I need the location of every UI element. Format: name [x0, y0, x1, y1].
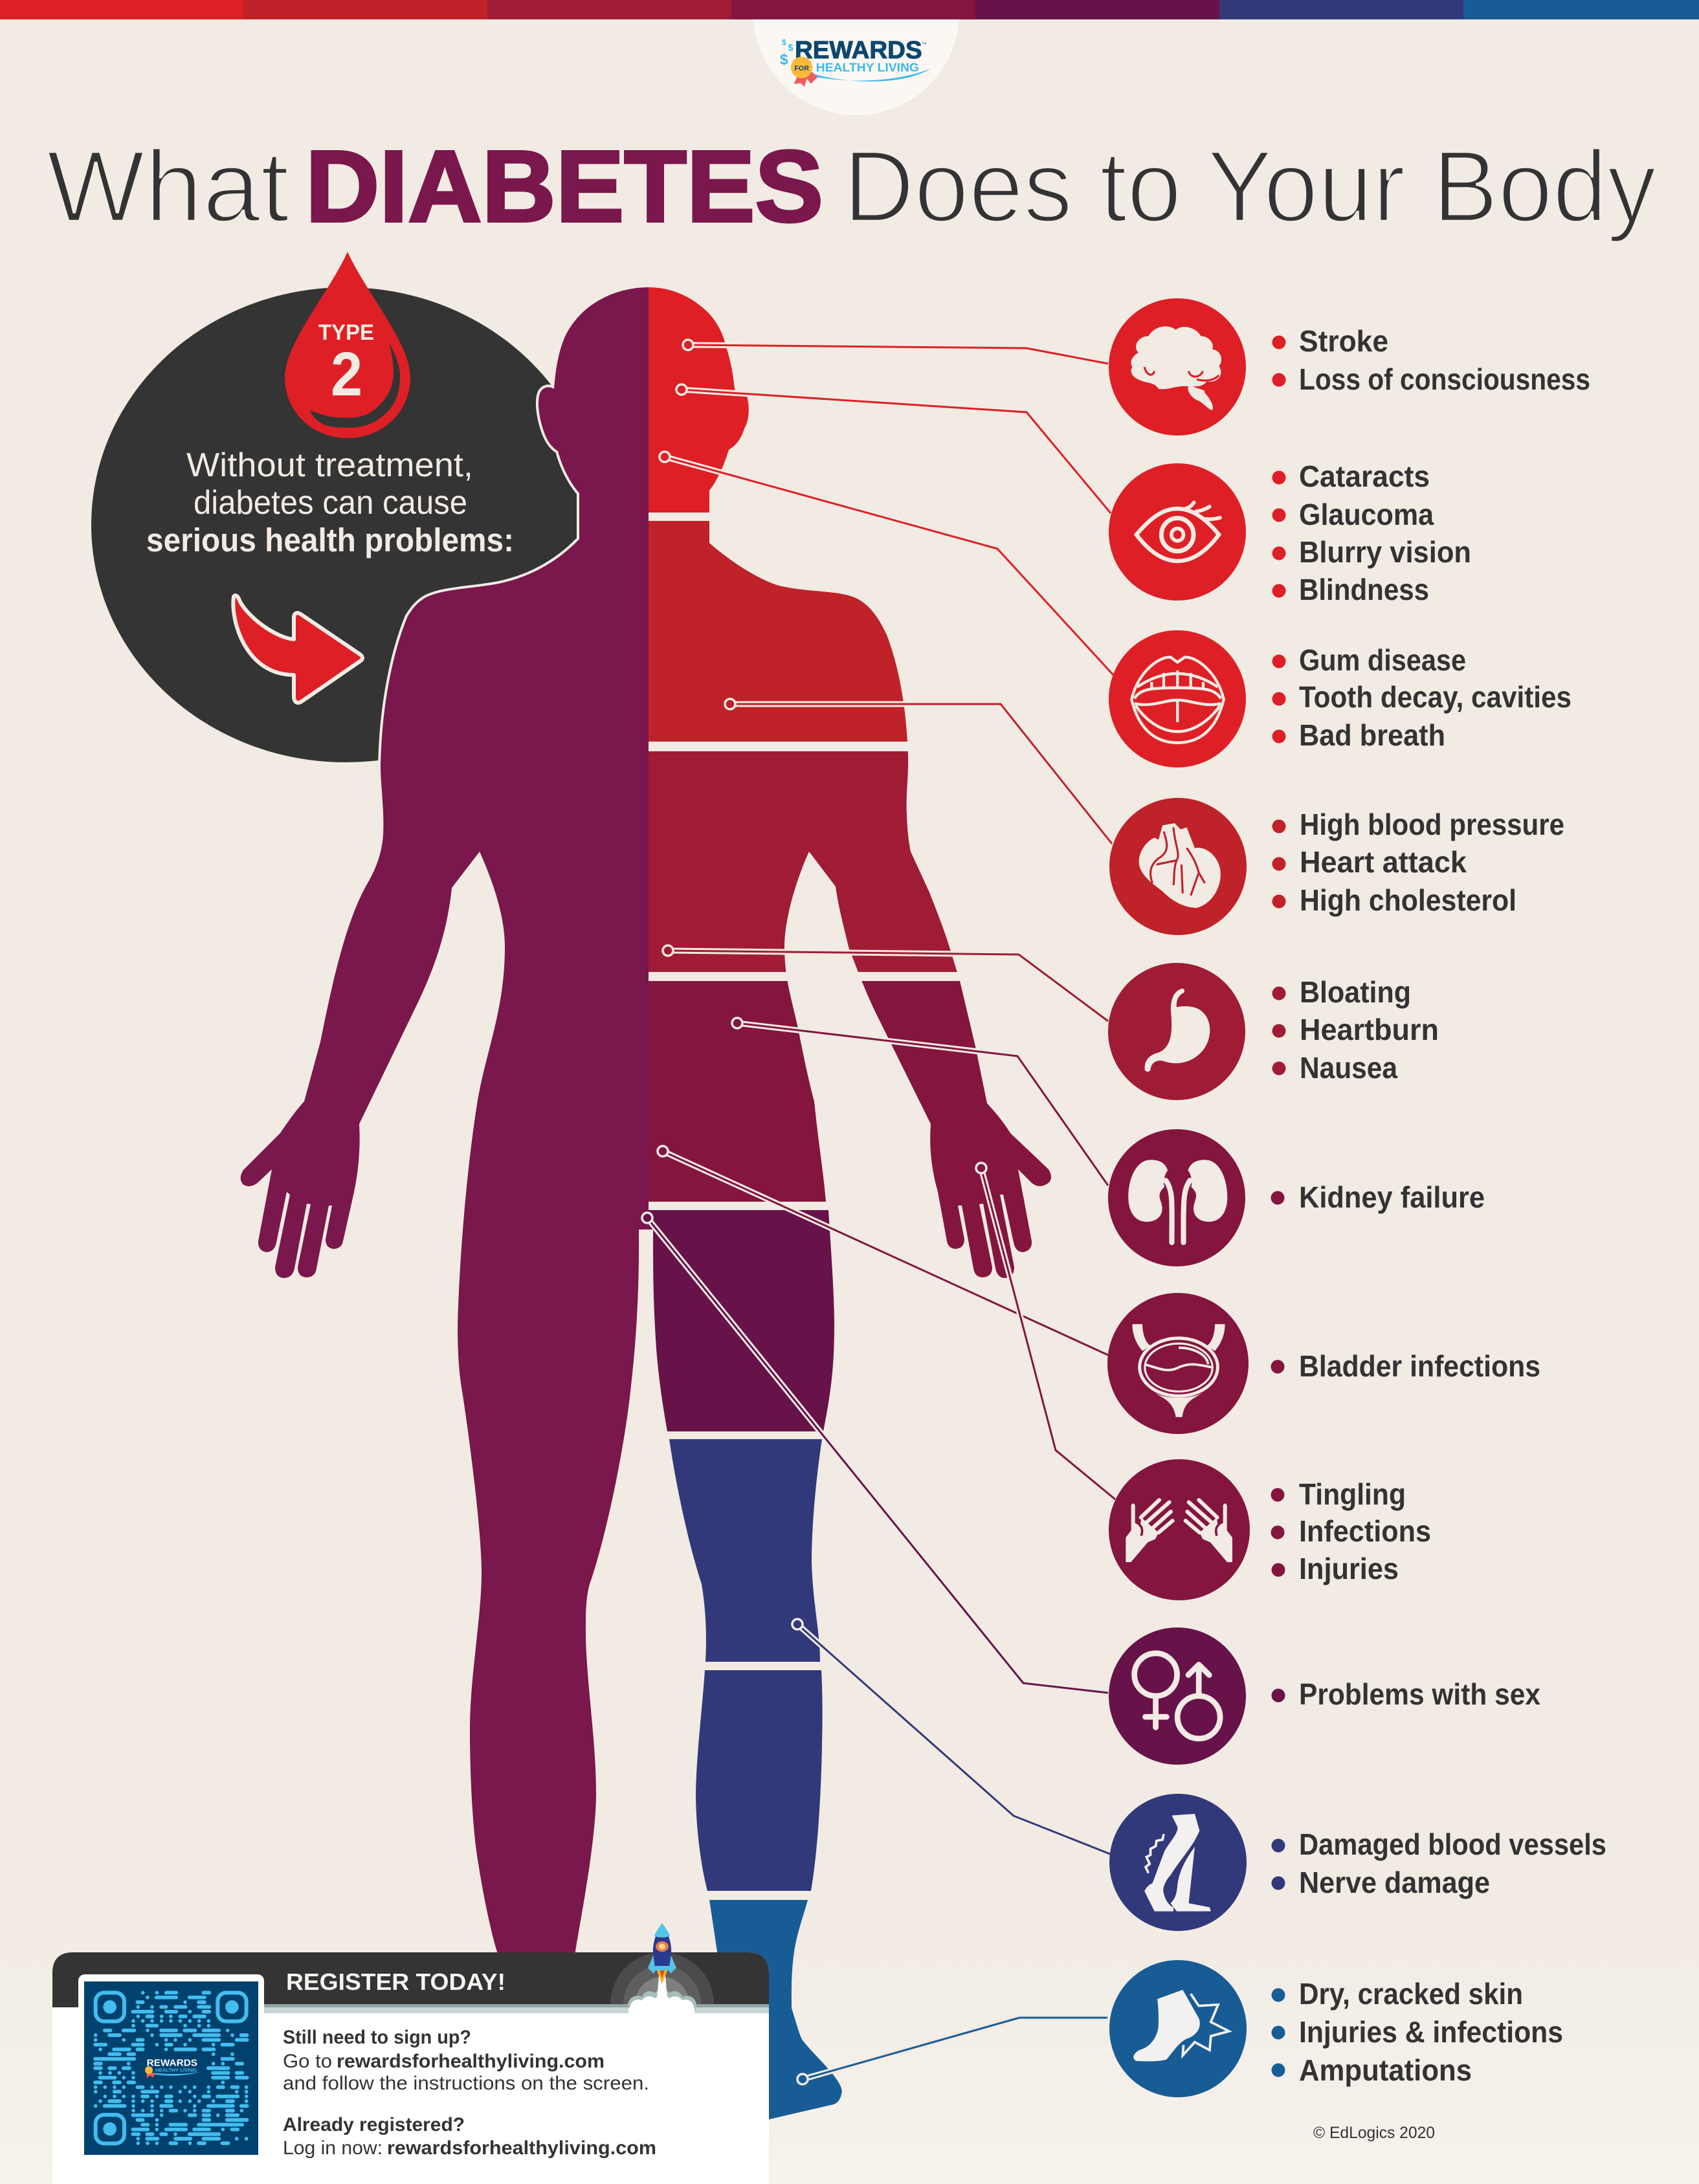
list: heart: High blood pressure	[1300, 808, 1564, 841]
list: feet: Amputations	[1299, 2053, 1472, 2087]
type 2 blood drop: TYPE	[318, 320, 374, 345]
logo: Rewards for Healthy Living: TM	[922, 41, 926, 45]
list: mouth	[1272, 643, 1571, 752]
list: brain	[1272, 324, 1590, 396]
icon: injured foot	[1133, 1990, 1229, 2061]
logo: Rewards for Healthy Living	[753, 0, 959, 115]
QR code	[78, 1974, 264, 2155]
list: stomach: Bloating	[1300, 975, 1411, 1009]
register text: sign up: Go to	[283, 2051, 332, 2072]
connector: eye	[676, 384, 1111, 513]
connector lines	[642, 340, 1115, 2084]
logo: Rewards for Healthy Living: $	[788, 43, 793, 53]
title: What	[47, 130, 289, 243]
connector: kidney	[732, 1018, 1108, 1186]
body: right silhouette colour bands	[649, 287, 1051, 2120]
list: heart	[1272, 808, 1564, 917]
list: legs	[1271, 1827, 1606, 1899]
register heading: REGISTER TODAY!	[286, 1969, 505, 1995]
list: stomach: Nausea	[1300, 1051, 1397, 1085]
register text: already registered: rewardsforhealthyliving.com	[387, 2137, 656, 2159]
panel: legs	[1109, 1794, 1606, 1931]
copyright: © EdLogics 2020	[1313, 2124, 1435, 2142]
list: eye: Glaucoma	[1299, 498, 1434, 531]
icon: hands	[1126, 1500, 1232, 1562]
list: heart: High cholesterol	[1300, 883, 1516, 917]
title: Does to Your Body	[843, 130, 1656, 243]
panel: brain	[1109, 298, 1590, 436]
panel: feet	[1109, 1960, 1563, 2097]
list: hands: Infections	[1299, 1514, 1431, 1548]
panel: heart	[1109, 798, 1564, 935]
QR code: HEALTHY LIVING	[155, 2068, 197, 2073]
list: kidney: Kidney failure	[1299, 1180, 1485, 1214]
list: stomach: Heartburn	[1300, 1013, 1439, 1046]
list: feet: Injuries & infections	[1299, 2015, 1563, 2049]
connector: stomach	[663, 945, 1108, 1021]
list: legs: Nerve damage	[1299, 1866, 1490, 1899]
title: DIABETES	[305, 130, 823, 243]
list: eye	[1272, 459, 1471, 606]
list: feet: Dry, cracked skin	[1299, 1977, 1523, 2011]
register text: sign up: rewardsforhealthyliving.com	[337, 2051, 605, 2072]
callout text: Without treatment,	[186, 447, 473, 484]
icon: female and male symbols	[1135, 1653, 1220, 1739]
panel: eye	[1109, 459, 1471, 606]
list: sexual health: Problems with sex	[1299, 1677, 1540, 1711]
body: left silhouette	[241, 287, 649, 1967]
icon: eye	[1137, 502, 1220, 561]
list: mouth: Bad breath	[1299, 718, 1445, 752]
logo: Rewards for Healthy Living: REWARDS	[795, 37, 922, 64]
title	[47, 130, 1656, 243]
list: mouth: Gum disease	[1299, 643, 1466, 677]
list: eye: Blurry vision	[1299, 535, 1471, 569]
arrow	[233, 595, 362, 703]
callout text: serious health problems:	[146, 522, 514, 558]
connector: feet	[797, 2018, 1107, 2084]
list: stomach	[1272, 975, 1439, 1085]
list: legs: Damaged blood vessels	[1299, 1827, 1606, 1861]
connector: brain	[683, 340, 1108, 364]
icon: kidneys	[1128, 1160, 1227, 1242]
panel: bladder	[1107, 1293, 1540, 1434]
icon: bladder	[1133, 1324, 1225, 1417]
connector: sexual organs	[642, 1213, 1108, 1693]
register text: sign up: and follow the instructions on the screen.	[283, 2073, 649, 2094]
connector: bladder	[658, 1146, 1108, 1355]
connector: legs	[792, 1619, 1110, 1854]
register text: sign up: Still need to sign up?	[283, 2027, 471, 2048]
connector: hands	[976, 1163, 1115, 1499]
panel: stomach	[1108, 963, 1439, 1100]
logo: Rewards for Healthy Living: HEALTHY LIVING	[816, 61, 919, 74]
register text: already registered	[283, 2114, 656, 2159]
callout text	[146, 447, 514, 558]
type 2 blood drop: 2	[331, 340, 362, 409]
panel: mouth	[1109, 630, 1571, 767]
list: feet	[1271, 1977, 1563, 2087]
connector: heart	[725, 699, 1112, 844]
icon: stomach	[1145, 989, 1210, 1072]
icon: mouth	[1131, 657, 1224, 743]
list: brain: Loss of consciousness	[1299, 362, 1590, 396]
list: mouth: Tooth decay, cavities	[1299, 680, 1571, 714]
register text: sign up	[283, 2027, 649, 2094]
list: eye: Cataracts	[1299, 459, 1430, 493]
list: hands: Injuries	[1299, 1552, 1399, 1585]
connector: mouth	[660, 452, 1113, 675]
list: bladder: Bladder infections	[1299, 1349, 1540, 1383]
icon: brain	[1131, 326, 1221, 410]
top colour bar	[0, 0, 1699, 19]
logo: Rewards for Healthy Living: FOR	[794, 65, 809, 72]
icon: legs	[1144, 1814, 1211, 1912]
list: eye: Blindness	[1299, 573, 1429, 606]
list: hands	[1271, 1477, 1431, 1585]
register text: already registered: Already registered?	[283, 2114, 465, 2135]
logo: Rewards for Healthy Living: $	[782, 38, 786, 47]
panel: kidney	[1108, 1129, 1485, 1266]
rocket launch illustration	[610, 1923, 714, 2016]
list: hands: Tingling	[1299, 1477, 1406, 1511]
type 2 blood drop	[285, 252, 410, 438]
dark callout circle	[91, 287, 600, 762]
register text: already registered: Log in now:	[283, 2137, 383, 2159]
list: brain: Stroke	[1299, 324, 1388, 358]
list: heart: Heart attack	[1300, 845, 1467, 879]
panel: sexual health	[1109, 1627, 1540, 1765]
logo: Rewards for Healthy Living: $	[780, 51, 788, 68]
panel: hands	[1109, 1459, 1431, 1600]
callout text: diabetes can cause	[194, 484, 467, 522]
register panel	[52, 1923, 769, 2184]
QR code: REWARDS	[147, 2058, 197, 2069]
icon: heart	[1139, 823, 1221, 908]
